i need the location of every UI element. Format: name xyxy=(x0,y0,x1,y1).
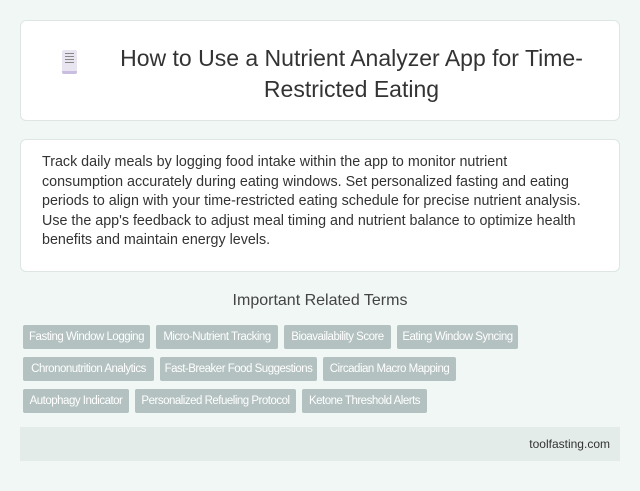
tags: Fasting Window Logging xyxy=(29,331,144,343)
tags: Bioavailability Score xyxy=(291,331,384,343)
title: How to Use a Nutrient Analyzer App for Time-Restricted Eating xyxy=(120,45,583,102)
tags: Fast-Breaker Food Suggestions xyxy=(165,363,312,375)
body text card: Track daily meals by logging food intake within the app to monitor nutrient consumption accurately during eating windows. Set personalized fasting and eating periods to align with your time-restricted eating schedule for precise nutrient analysis. Use the app's feedback to adjust meal timing and nutrient balance to optimize health benefits and maintain energy levels. xyxy=(42,154,581,248)
related terms heading: Important Related Terms xyxy=(233,292,407,309)
tags: Micro-Nutrient Tracking xyxy=(163,331,271,343)
title card xyxy=(20,20,620,121)
tags: Personalized Refueling Protocol xyxy=(141,395,290,407)
tags: Eating Window Syncing xyxy=(402,331,513,343)
footer xyxy=(20,427,620,461)
tags: Ketone Threshold Alerts xyxy=(309,395,420,407)
body text card xyxy=(20,139,620,272)
tags: Circadian Macro Mapping xyxy=(330,363,449,375)
tags: Autophagy Indicator xyxy=(30,395,122,407)
icon: receipt xyxy=(62,50,77,74)
tags: Chrononutrition Analytics xyxy=(31,363,146,375)
footer: toolfasting.com xyxy=(529,437,610,451)
